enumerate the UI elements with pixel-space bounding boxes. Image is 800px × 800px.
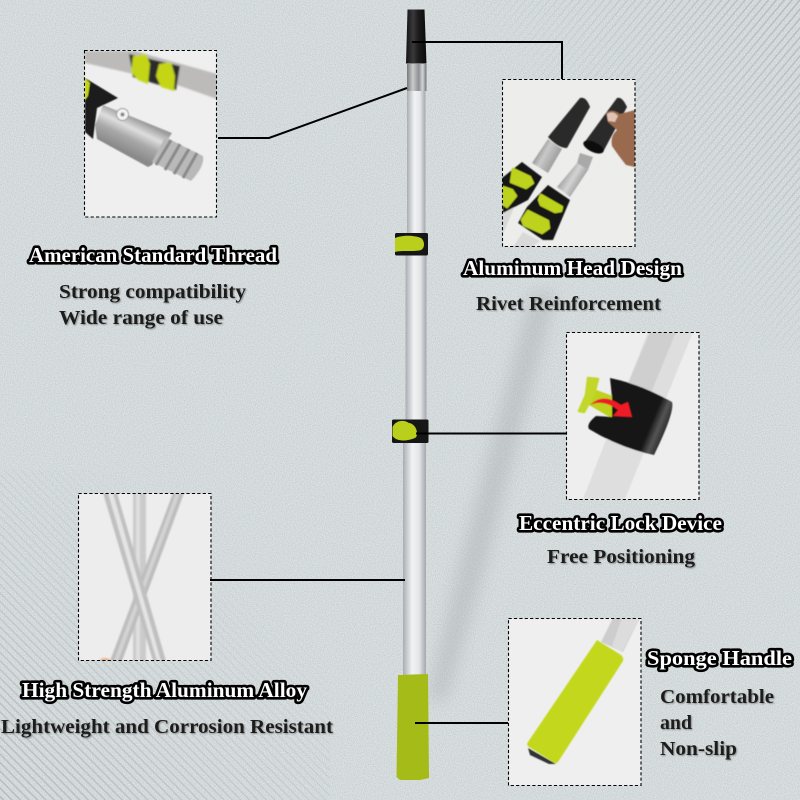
black head cap	[406, 10, 426, 64]
pole middle tube	[406, 255, 426, 420]
falling rod	[103, 493, 166, 661]
arrow: head connector	[412, 42, 562, 79]
threaded metal end	[95, 105, 172, 167]
angled tube	[583, 332, 693, 499]
green foam grip	[527, 640, 623, 763]
yellow lever	[590, 390, 612, 417]
arrow: handle connector	[415, 722, 508, 724]
text: thread benefits: Strong compatibility	[59, 282, 246, 303]
panel: aluminum head design	[502, 80, 635, 247]
blurred tube with clips	[85, 51, 217, 99]
panel: sponge handle	[508, 618, 641, 786]
rivet	[116, 108, 128, 120]
text: comfortable and non-slip: Comfortable	[660, 687, 774, 708]
upper lock clip	[395, 233, 428, 256]
telescopic pole	[392, 10, 429, 780]
lower lock clip	[392, 420, 428, 443]
pole upper tube	[407, 91, 426, 234]
right threaded tube	[513, 153, 593, 247]
heading: eccentric lock device: Eccentric Lock Device	[519, 511, 722, 535]
detached black cap	[584, 98, 627, 152]
black grip	[85, 78, 118, 139]
heading: high strength aluminum alloy: High Strength Aluminum Alloy	[22, 678, 308, 702]
heading: american standard thread: American Standard Thread	[29, 243, 277, 267]
text: free positioning: Free Positioning	[547, 547, 695, 568]
text: thread benefits: Wide range of use	[59, 308, 223, 329]
heading: sponge handle: Sponge Handle	[647, 646, 792, 670]
text: comfortable and non-slip	[660, 687, 774, 760]
arrow: lock connector	[416, 432, 566, 434]
metal collar	[407, 64, 426, 91]
hand	[606, 110, 635, 167]
pole lower tube	[403, 443, 426, 677]
sponge handle	[396, 674, 429, 780]
text: rivet reinforcement: Rivet Reinforcement	[476, 294, 662, 315]
finger tip	[100, 658, 110, 662]
arrow: thread connector	[218, 88, 407, 138]
text: comfortable and non-slip: and	[660, 713, 692, 734]
panel: high strength aluminum alloy	[78, 493, 211, 662]
left tube with cap	[502, 98, 590, 232]
arrow: alloy connector	[210, 579, 405, 581]
tube	[600, 618, 633, 652]
text: comfortable and non-slip: Non-slip	[660, 739, 737, 760]
vertical rod	[133, 493, 146, 661]
heading: aluminum head design: Aluminum Head Design	[463, 256, 682, 280]
rising rod	[110, 493, 184, 661]
red rotation arrow	[590, 398, 632, 417]
text: lightweight and corrosion resistant: Lightweight and Corrosion Resistant	[1, 717, 334, 738]
dark handle end	[528, 748, 556, 764]
text: thread benefits	[59, 282, 246, 329]
black lock body	[588, 378, 672, 455]
panel: american standard thread	[84, 50, 217, 217]
panel: eccentric lock device	[566, 332, 699, 500]
